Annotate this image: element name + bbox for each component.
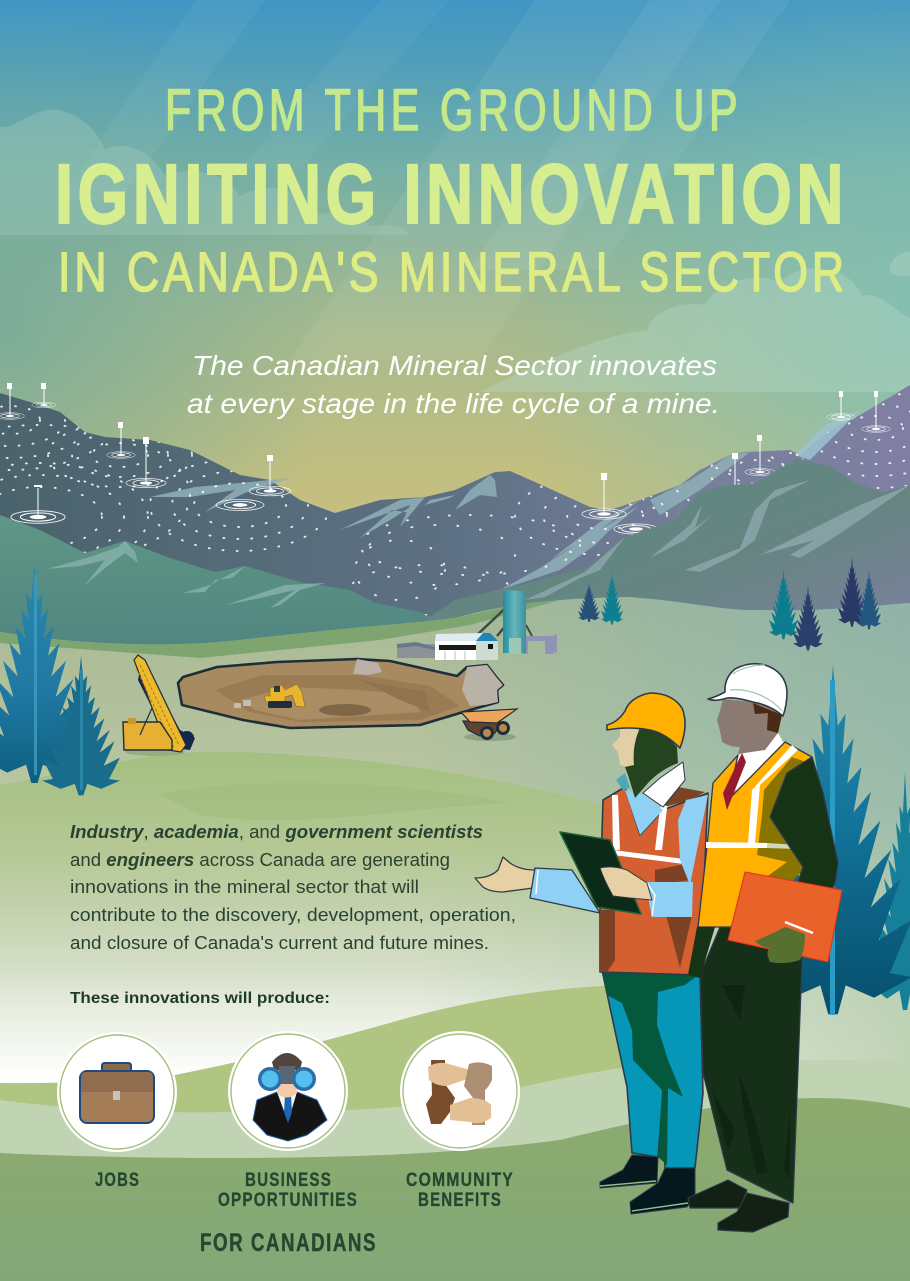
tablet	[560, 832, 641, 914]
face and hair	[717, 699, 782, 754]
body paragraph: and engineers across Canada are generating	[70, 850, 450, 870]
foreground mountain left	[0, 515, 470, 660]
shirt and collar	[616, 762, 708, 885]
label: jobs: JOBS	[95, 1170, 140, 1191]
label: business opportunities	[218, 1170, 358, 1211]
clouds right	[480, 252, 910, 392]
subtitle: The Canadian Mineral Sector innovates	[192, 350, 717, 381]
snow streaks	[150, 410, 860, 590]
icon: briefcase	[57, 1032, 177, 1152]
big right trees	[754, 664, 910, 1015]
closing line: FOR CANADIANS	[200, 1229, 377, 1257]
drill grid dots	[0, 368, 910, 615]
head and hair	[612, 727, 678, 798]
label: business opportunities: OPPORTUNITIES	[218, 1190, 358, 1211]
icon: person with binoculars	[228, 1031, 348, 1151]
worker: man	[688, 664, 842, 1232]
vest	[600, 785, 708, 975]
innovations heading: These innovations will produce:	[70, 990, 330, 1007]
clouds left	[0, 110, 410, 235]
hard hat	[607, 693, 685, 748]
jacket	[688, 757, 838, 978]
white hard hat	[708, 664, 787, 716]
label: community benefits: BENEFITS	[418, 1190, 502, 1211]
icon: community hands	[400, 1031, 520, 1151]
open pit mine	[178, 659, 503, 728]
light rays	[60, 0, 790, 360]
trees mid-distance	[578, 557, 881, 650]
background mountains with exploration grid	[0, 383, 910, 618]
rolling hills foreground	[0, 985, 910, 1281]
trousers	[700, 927, 802, 1203]
meadow and valley floor	[0, 597, 910, 1060]
body paragraph: and closure of Canada's current and future mines.	[70, 933, 489, 953]
label: community benefits	[406, 1170, 514, 1211]
title	[55, 78, 848, 303]
body paragraph: Industry, academia, and government scientists	[70, 822, 483, 842]
body paragraph: innovations in the mineral sector that will	[70, 877, 419, 897]
mine headframe and buildings	[397, 590, 557, 660]
vest	[698, 742, 812, 927]
hand on tablet	[600, 867, 652, 900]
body paragraph	[70, 822, 516, 953]
trees left	[0, 562, 120, 795]
tie	[723, 753, 746, 810]
foreground mountain right	[410, 458, 910, 640]
drill rig	[123, 655, 195, 756]
worker: woman	[475, 693, 708, 1214]
sky background	[0, 0, 910, 660]
label: community benefits: COMMUNITY	[406, 1170, 514, 1191]
boots	[600, 1155, 695, 1214]
drill sites	[0, 383, 890, 534]
folder	[728, 872, 842, 962]
subtitle: at every stage in the life cycle of a mine.	[187, 388, 720, 419]
shoes	[688, 1180, 789, 1232]
trousers	[602, 970, 703, 1168]
body paragraph: contribute to the discovery, development, operation,	[70, 905, 516, 925]
label: business opportunities: BUSINESS	[245, 1170, 332, 1191]
collar	[735, 733, 785, 790]
mining truck	[461, 709, 517, 741]
hand and cuff	[755, 922, 813, 963]
excavator	[264, 684, 305, 708]
subtitle	[187, 350, 720, 419]
arm and hand	[475, 857, 693, 917]
